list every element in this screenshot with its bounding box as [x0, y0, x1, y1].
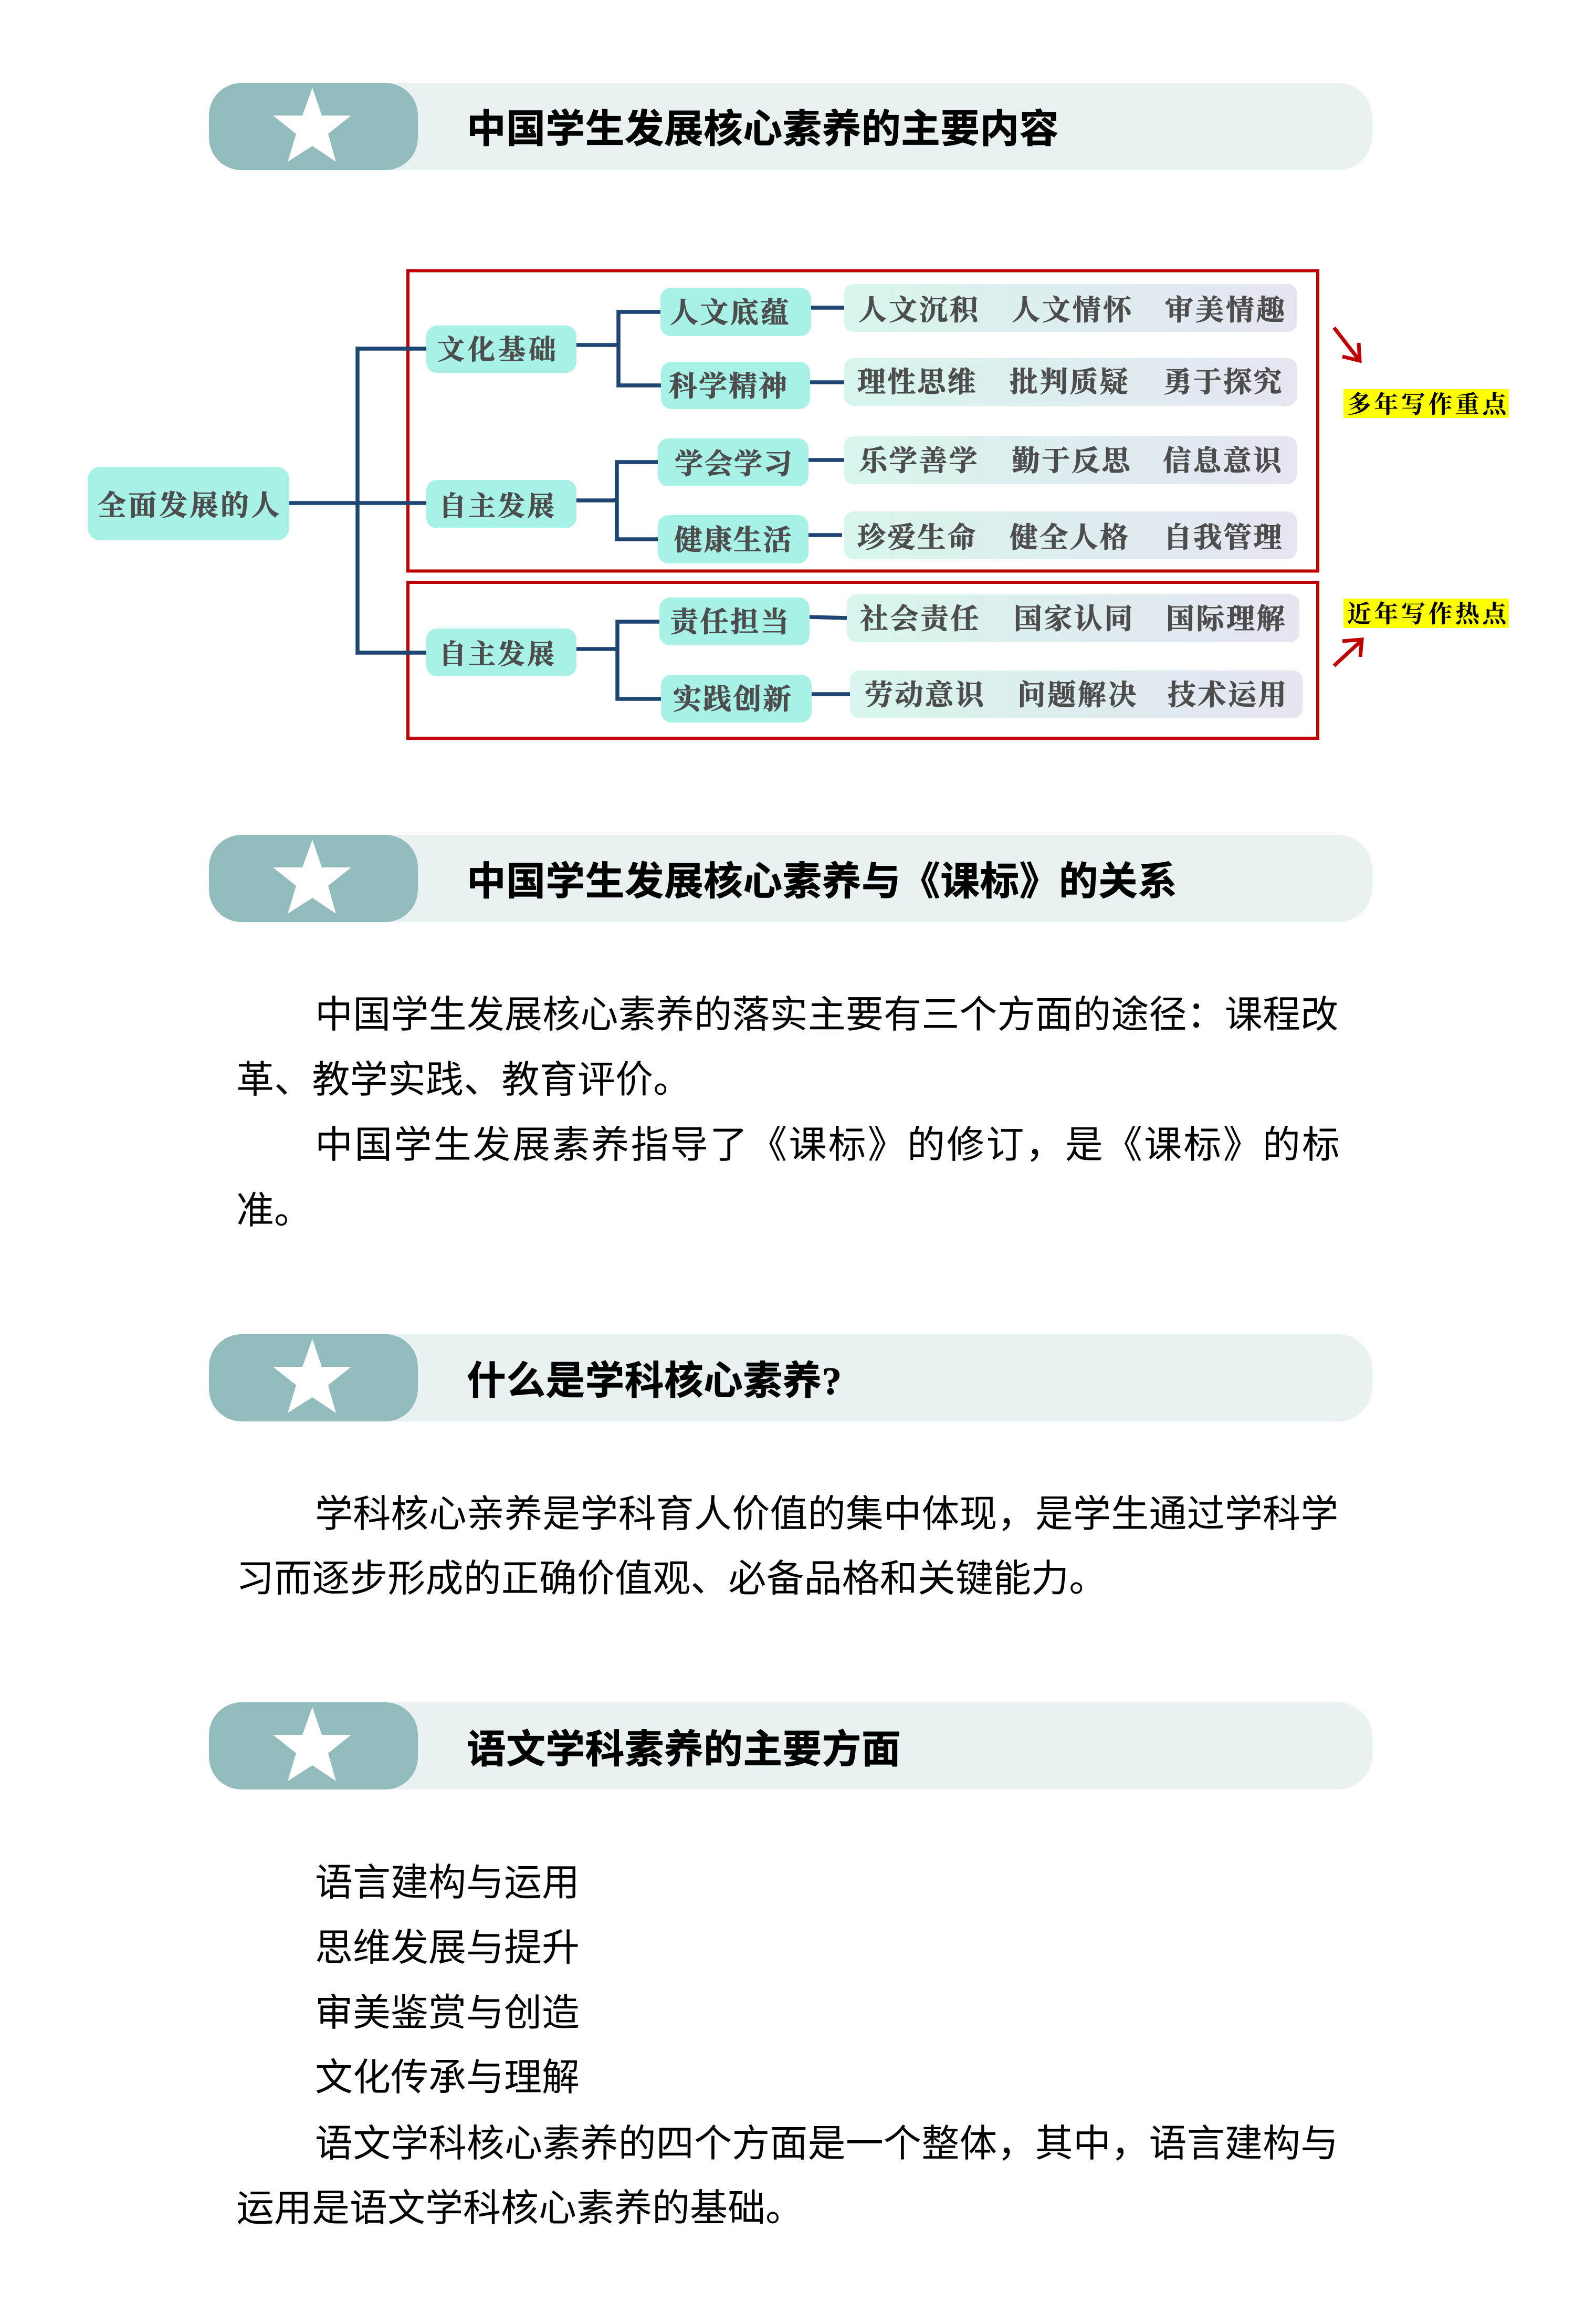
- root node: 全面发展的人: 全面发展的人: [98, 490, 282, 521]
- node: 人文底蕴: 人文底蕴: [670, 297, 791, 329]
- node: 科学精神: 科学精神: [669, 371, 789, 402]
- red frame: 近年写作热点: [408, 582, 1318, 738]
- row: 学会学习 details: [844, 436, 1297, 484]
- section header: 语文学科素养的主要方面: [209, 1702, 1372, 1789]
- node: 自主发展 (2): [426, 629, 576, 676]
- row: 科学精神 details: 勇于探究: [1163, 367, 1284, 398]
- row: 学会学习 details: 勤于反思: [1012, 445, 1133, 477]
- section header: 什么是学科核心素养: [209, 1334, 1372, 1421]
- text block: 学科核心素养定义: 习而逐步形成的正确价值观、必备品格和关键能力。: [236, 1558, 1107, 1600]
- row: 人文底蕴 details: 人文沉积: [858, 295, 980, 326]
- node: 人文底蕴: [660, 288, 811, 336]
- icon: star: [273, 840, 351, 914]
- node: 文化基础: [426, 326, 576, 373]
- text block: 落实途径: 中国学生发展核心素养的落实主要有三个方面的途径：课程改: [315, 994, 1338, 1036]
- row: 人文底蕴 details: 人文情怀: [1012, 295, 1133, 326]
- callout: 多年写作重点: 多年写作重点: [1347, 391, 1509, 418]
- text block: 四个方面: 语文学科核心素养的四个方面是一个整体，其中，语言建构与: [315, 2123, 1338, 2165]
- row: 实践创新 details: 问题解决: [1017, 679, 1138, 711]
- text block: 学科核心素养定义: 学科核心亲养是学科育人价值的集中体现，是学生通过学科学: [315, 1493, 1338, 1535]
- text block: 落实途径: 准。: [236, 1190, 312, 1232]
- node: 自主发展: [426, 480, 576, 528]
- icon: star: [273, 1339, 351, 1413]
- row: 责任担当 details: 社会责任: [860, 603, 981, 635]
- heading: 语文学科素养的主要方面: 语文学科素养的主要方面: [467, 1727, 901, 1771]
- row: 实践创新 details: [850, 671, 1303, 718]
- row: 责任担当 details: [847, 594, 1299, 642]
- node: 科学精神: [661, 362, 810, 409]
- row: 人文底蕴 details: [844, 284, 1297, 332]
- red frame: 多年写作重点: [408, 271, 1318, 571]
- arrow: up-right red: [1334, 640, 1362, 666]
- row: 健康生活 details: 健全人格: [1010, 522, 1130, 553]
- row: 学会学习 details: 信息意识: [1163, 445, 1284, 477]
- heading: 与《课标》的关系: 中国学生发展核心素养与《课标》的关系: [467, 859, 1177, 903]
- row: 责任担当 details: 国家认同: [1014, 603, 1135, 635]
- row: 实践创新 details: 劳动意识: [865, 679, 986, 711]
- icon: star: [273, 1707, 351, 1781]
- node: 自主发展 (2): 自主发展: [439, 640, 556, 670]
- row: 健康生活 details: 珍爱生命: [857, 522, 978, 553]
- root node: 全面发展的人: [88, 467, 289, 540]
- node: 责任担当: 责任担当: [670, 606, 791, 638]
- node: 学会学习: 学会学习: [675, 448, 793, 480]
- node: 自主发展: 自主发展: [439, 492, 556, 522]
- text block: 落实途径: [236, 994, 1341, 1232]
- node: 学会学习: [658, 438, 808, 486]
- row: 科学精神 details: 理性思维: [857, 367, 978, 398]
- arrow: down-right red: [1334, 328, 1360, 361]
- icon: star: [273, 88, 351, 162]
- text block: 落实途径: 革、教学实践、教育评价。: [236, 1059, 691, 1101]
- text block: 四个方面: 运用是语文学科核心素养的基础。: [236, 2187, 803, 2229]
- node: 实践创新: 实践创新: [673, 684, 793, 715]
- text block: 四个方面: [236, 1862, 1338, 2229]
- row: 人文底蕴 details: 审美情趣: [1165, 295, 1287, 326]
- node: 责任担当: [659, 598, 810, 645]
- section header: 主要内容: [209, 83, 1372, 170]
- heading: 主要内容: 中国学生发展核心素养的主要内容: [467, 107, 1059, 151]
- section header: 与《课标》的关系: [209, 835, 1372, 922]
- mind map: [88, 271, 1509, 738]
- callout: 近年写作热点: 近年写作热点: [1347, 601, 1509, 627]
- row: 实践创新 details: 技术运用: [1168, 679, 1288, 711]
- row: 健康生活 details: [844, 511, 1297, 559]
- row: 责任担当 details: 国际理解: [1166, 603, 1287, 635]
- row: 科学精神 details: [844, 358, 1297, 406]
- row: 健康生活 details: 自我管理: [1163, 522, 1284, 553]
- text block: 四个方面: 思维发展与提升: [315, 1927, 580, 1969]
- text block: 落实途径: 中国学生发展素养指导了《课标》的修订，是《课标》的标: [315, 1124, 1341, 1166]
- row: 学会学习 details: 乐学善学: [859, 445, 979, 477]
- node: 文化基础: 文化基础: [437, 336, 559, 365]
- text block: 学科核心素养定义: [236, 1493, 1338, 1600]
- text block: 四个方面: 审美鉴赏与创造: [315, 1992, 580, 2034]
- node: 健康生活: [658, 515, 808, 563]
- text block: 四个方面: 文化传承与理解: [315, 2057, 580, 2099]
- node: 实践创新: [661, 675, 812, 723]
- connector lines: [289, 308, 850, 699]
- node: 健康生活: 健康生活: [674, 525, 793, 556]
- heading: 什么是学科核心素养: 什么是学科核心素养?: [467, 1358, 842, 1403]
- row: 科学精神 details: 批判质疑: [1010, 367, 1130, 398]
- text block: 四个方面: 语言建构与运用: [315, 1862, 580, 1904]
